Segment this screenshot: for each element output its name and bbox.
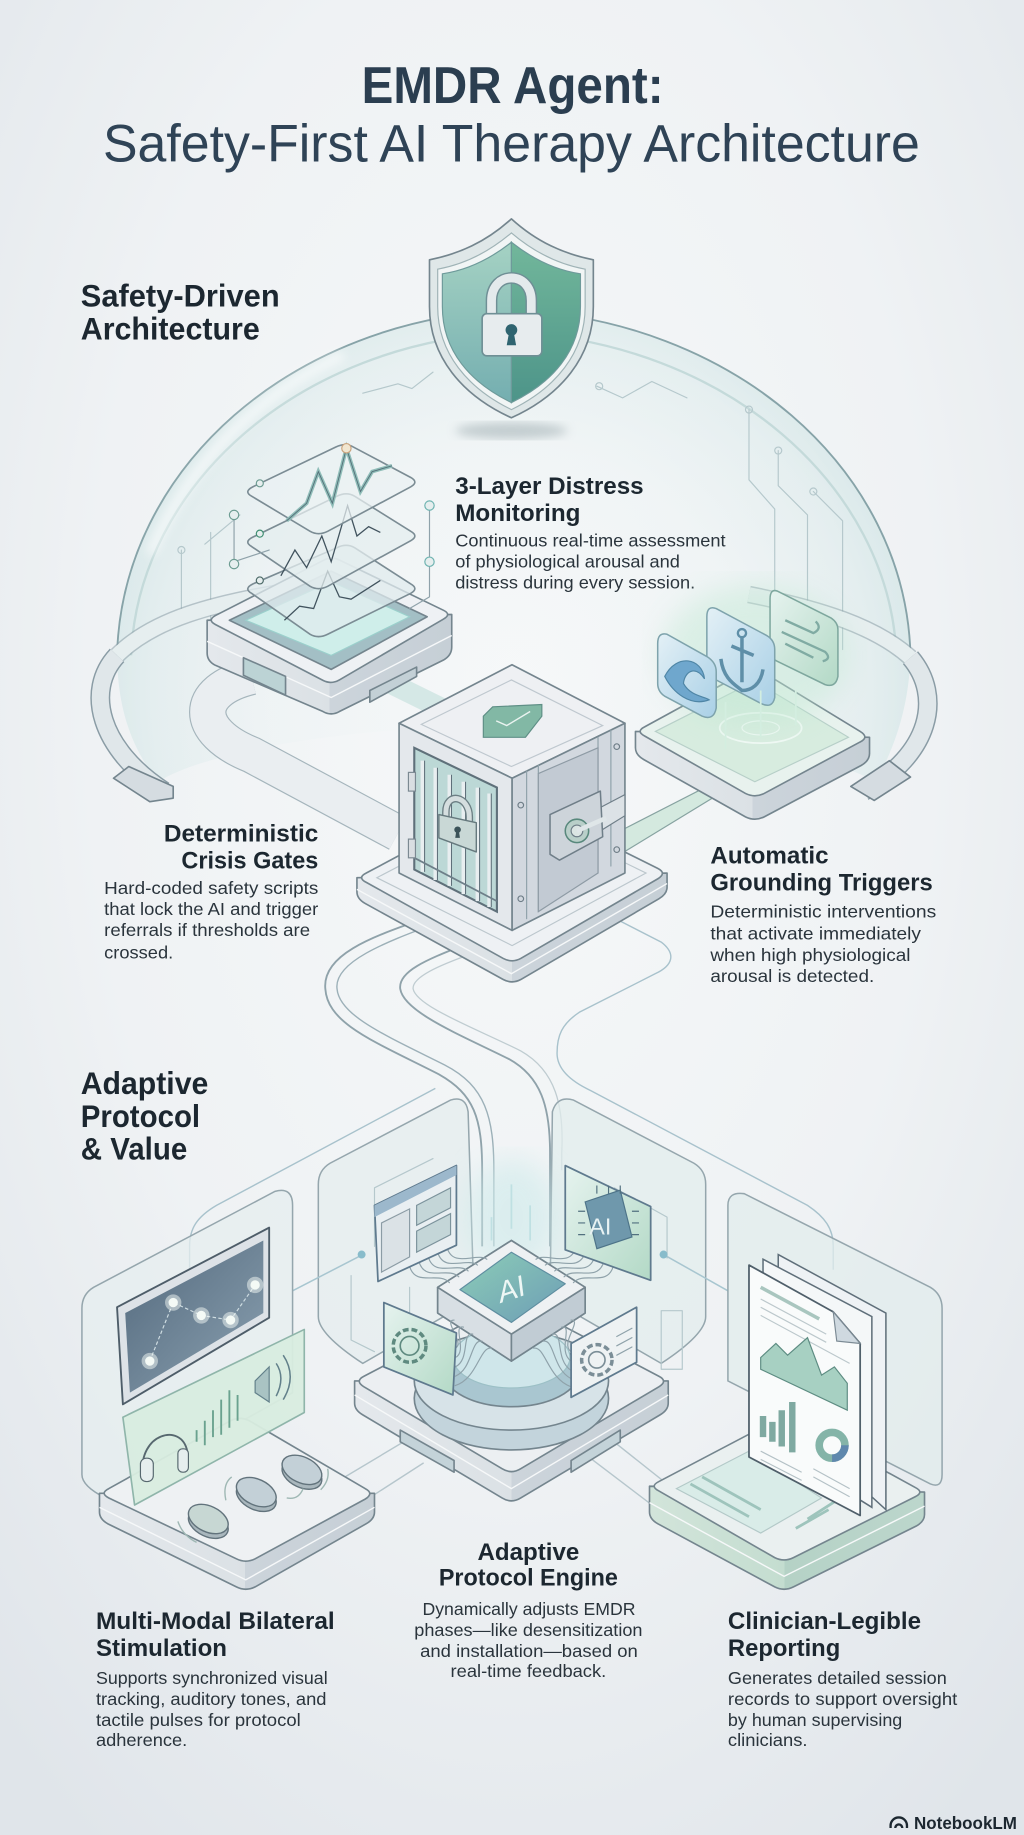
text: Multi-Modal Bilateral Stimulation: tactile pulses for protocol (96, 1710, 301, 1730)
NotebookLM watermark: NotebookLM (914, 1813, 1017, 1833)
text: Clinician-Legible Reporting (728, 1608, 957, 1750)
text: Multi-Modal Bilateral Stimulation: Multi-Modal Bilateral (96, 1608, 335, 1635)
text: 3-Layer Distress Monitoring (455, 473, 726, 593)
text: Automatic Grounding Triggers: Automatic (710, 843, 829, 870)
text: Deterministic Crisis Gates: that lock the AI and trigger (104, 899, 318, 919)
layer 1 (248, 444, 415, 534)
text: Adaptive Protocol Engine: and installation—based on (420, 1641, 638, 1661)
text: Clinician-Legible Reporting: clinicians. (728, 1730, 807, 1750)
ribbon to grounding triggers (620, 782, 716, 854)
right connector band (573, 1430, 685, 1512)
reporting back panel (728, 1193, 942, 1485)
text: 3-Layer Distress Monitoring: 3-Layer Distress (455, 473, 644, 500)
text: Automatic Grounding Triggers: Grounding Triggers (710, 870, 933, 897)
section heading: Safety-Driven Architecture: Safety-Driven (81, 278, 280, 314)
layer 3 (248, 545, 415, 637)
monitor side nodes (229, 480, 434, 609)
text: 3-Layer Distress Monitoring: of physiological arousal and (455, 552, 680, 572)
section heading: Adaptive Protocol & Value: Adaptive (81, 1065, 208, 1101)
reporting platform (650, 1418, 925, 1589)
text: Deterministic Crisis Gates: Hard-coded safety scripts (104, 878, 318, 898)
section heading: Safety-Driven Architecture: Architecture (81, 310, 260, 346)
vault right face (512, 723, 625, 930)
tile: AI processor: AI (589, 1214, 611, 1240)
report pages (749, 1255, 886, 1516)
cage padlock (439, 799, 476, 852)
text: Adaptive Protocol Engine: Protocol Engine (439, 1565, 618, 1592)
engine pedestal (414, 1327, 609, 1450)
section heading: Safety-Driven Architecture (81, 278, 280, 346)
text: Clinician-Legible Reporting: Reporting (728, 1635, 840, 1662)
tactile pulsers (178, 1449, 328, 1544)
text: 3-Layer Distress Monitoring: Monitoring (455, 500, 580, 527)
grounding icons (658, 591, 838, 749)
section heading: Adaptive Protocol & Value: Protocol (81, 1098, 200, 1134)
wide connector ribbon from monitor to gate (208, 676, 462, 833)
vault top badge (483, 705, 542, 737)
dome base ring left (100, 589, 304, 802)
bar chart (763, 1402, 792, 1452)
left connector band (325, 1442, 424, 1510)
area chart (761, 1338, 847, 1410)
text: Adaptive Protocol Engine: Dynamically adjusts EMDR (422, 1599, 635, 1619)
text: Clinician-Legible Reporting: by human supervising (728, 1710, 902, 1730)
section heading: Adaptive Protocol & Value (81, 1065, 208, 1167)
text: Deterministic Crisis Gates: crossed. (104, 942, 173, 962)
text: Adaptive Protocol Engine: phases—like desensitization (414, 1620, 642, 1640)
text: Multi-Modal Bilateral Stimulation: Stimulation (96, 1635, 227, 1662)
glass dome (117, 310, 910, 782)
grounding platform (635, 585, 870, 819)
section heading: Adaptive Protocol & Value: & Value (81, 1131, 187, 1167)
text: Multi-Modal Bilateral Stimulation: tracking, auditory tones, and (96, 1689, 327, 1709)
AI chip: AI (492, 1271, 530, 1310)
wind tile (770, 591, 838, 685)
title: Safety-First AI Therapy Architecture (103, 114, 920, 173)
title: EMDR Agent: (362, 56, 664, 114)
anchor tile (707, 608, 775, 705)
wave tile (658, 634, 716, 717)
stimulation group (82, 1190, 374, 1589)
text: Deterministic Crisis Gates: Crisis Gates (181, 847, 318, 874)
vault left face (399, 723, 512, 930)
text: Clinician-Legible Reporting: Generates detailed session (728, 1668, 947, 1688)
tile: gear grey (571, 1307, 637, 1397)
vault top (399, 665, 625, 778)
engine back panels (293, 1099, 728, 1369)
text: Deterministic Crisis Gates (104, 820, 318, 962)
layer 2 (248, 494, 415, 589)
dome base ring right (749, 595, 928, 800)
stimulation back panel (82, 1190, 293, 1498)
chip wires (410, 1248, 613, 1387)
crisis gate vault (399, 665, 625, 930)
engine base (355, 1301, 668, 1501)
vault latch (550, 791, 625, 860)
text: 3-Layer Distress Monitoring: Continuous real-time assessment (455, 531, 726, 551)
text: Multi-Modal Bilateral Stimulation: adherence. (96, 1730, 187, 1750)
text: Automatic Grounding Triggers: Deterministic interventions (710, 901, 936, 921)
text: Automatic Grounding Triggers (709, 843, 936, 986)
text: Deterministic Crisis Gates: Deterministic (164, 820, 318, 847)
stimulation platform (99, 1418, 374, 1589)
text: 3-Layer Distress Monitoring: distress during every session. (455, 573, 695, 593)
text: Clinician-Legible Reporting: Clinician-Legible (728, 1608, 921, 1635)
pipes between gate and engine (190, 915, 833, 1270)
tile: gear green (384, 1303, 456, 1395)
monitoring layers (229, 444, 434, 637)
text: Adaptive Protocol Engine: real-time feedback. (451, 1661, 606, 1681)
text: Automatic Grounding Triggers: when high physiological (709, 945, 910, 965)
cage door (408, 748, 497, 912)
crisis gate base (357, 798, 667, 982)
text: Adaptive Protocol Engine (414, 1539, 642, 1681)
text: Multi-Modal Bilateral Stimulation: Supports synchronized visual (96, 1668, 328, 1688)
visual tracking screen (117, 1228, 269, 1404)
monitoring platform (207, 558, 452, 714)
auditory panel (123, 1329, 304, 1505)
AI chip (410, 1240, 613, 1387)
text: Deterministic Crisis Gates: referrals if thresholds are (104, 920, 310, 940)
donut chart (819, 1432, 845, 1458)
title (103, 56, 920, 173)
text: Multi-Modal Bilateral Stimulation (96, 1608, 335, 1750)
shield with padlock (429, 219, 593, 439)
tile: browser window (374, 1166, 456, 1281)
text: Clinician-Legible Reporting: records to support oversight (728, 1689, 957, 1709)
reporting group (650, 1193, 942, 1589)
text: Adaptive Protocol Engine: Adaptive (477, 1539, 579, 1566)
tile: AI processor (565, 1166, 651, 1280)
text: Automatic Grounding Triggers: arousal is detected. (710, 966, 874, 986)
text: Automatic Grounding Triggers: that activate immediately (710, 924, 921, 944)
